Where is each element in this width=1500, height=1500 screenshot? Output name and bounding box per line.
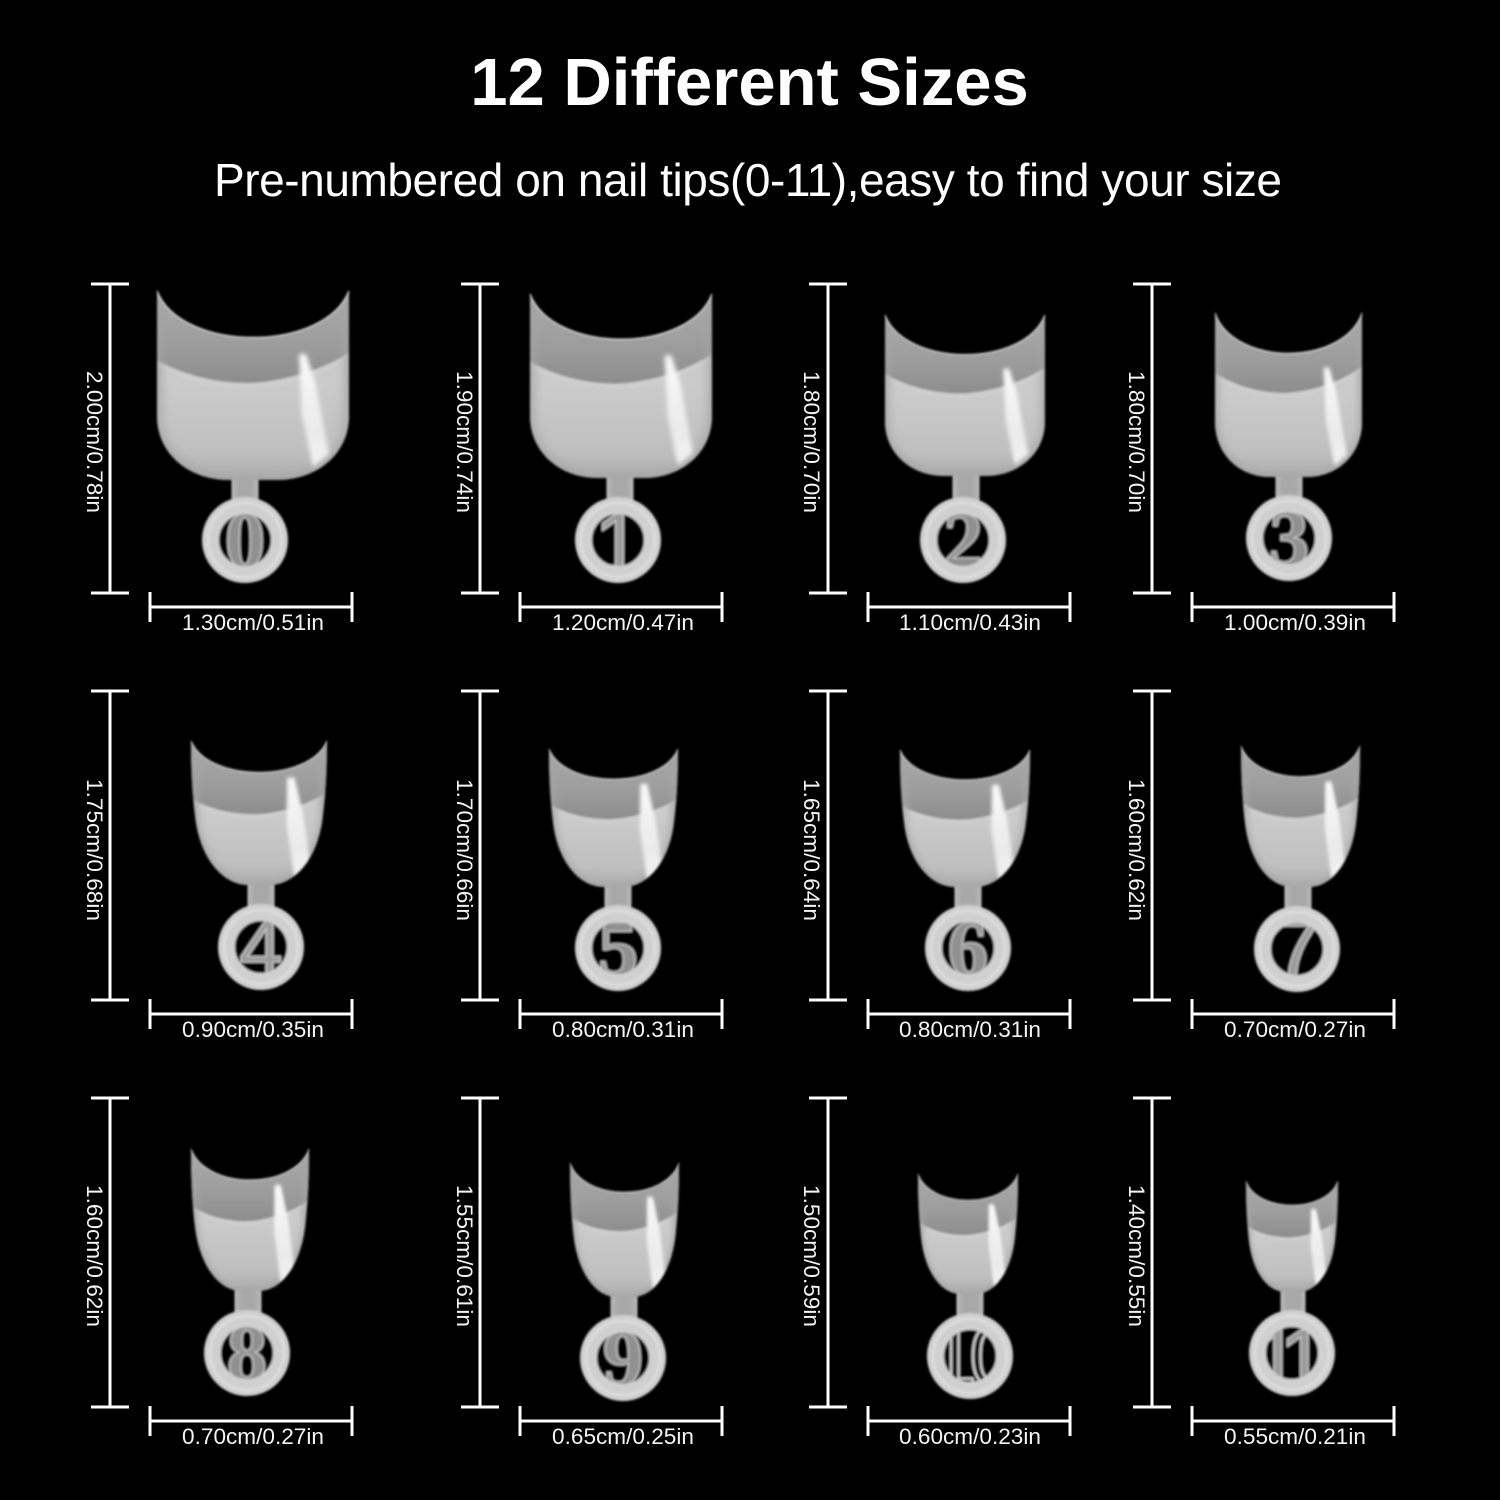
size 2 cell [799,284,1070,635]
size 10 cell [799,1098,1070,1449]
width dimension size 8 [150,1406,352,1449]
width dimension size 1 [520,592,722,635]
height dimension size 3: 1.80cm/0.70in [1124,371,1149,513]
nail tip size 2 [883,313,1047,585]
width dimension size 3: 1.00cm/0.39in [1224,610,1366,635]
nail tip size 7: 7 [1274,902,1320,996]
width dimension size 6: 0.80cm/0.31in [899,1017,1041,1042]
width dimension size 0: 1.30cm/0.51in [182,610,324,635]
nail tip size 3: 3 [1269,495,1309,583]
nail tip size 11 [1245,1180,1339,1406]
nail tip size 7 [1240,745,1361,996]
size 0 cell [82,284,352,635]
nail tip size 3 [1213,311,1364,583]
width dimension size 9: 0.65cm/0.25in [552,1424,694,1449]
width dimension size 2: 1.10cm/0.43in [899,610,1041,635]
height dimension size 10 [799,1098,847,1407]
height dimension size 0: 2.00cm/0.78in [82,371,107,513]
width dimension size 11 [1192,1406,1394,1449]
nail tip size 0 [155,289,351,585]
height dimension size 8 [82,1098,129,1407]
height dimension size 7: 1.60cm/0.62in [1124,779,1149,921]
height dimension size 11 [1124,1098,1171,1407]
size 1 cell [452,284,722,635]
width dimension size 9 [520,1406,722,1449]
width dimension size 4 [150,999,352,1042]
nail tip size 5 [548,748,679,993]
width dimension size 10: 0.60cm/0.23in [899,1424,1041,1449]
height dimension size 6: 1.65cm/0.64in [799,779,824,921]
width dimension size 10 [868,1406,1070,1449]
nail tip size 8: 8 [227,1310,267,1398]
height dimension size 11: 1.40cm/0.55in [1124,1185,1149,1327]
nail tip size 4: 4 [239,903,283,991]
height dimension size 5 [452,691,499,1000]
width dimension size 4: 0.90cm/0.35in [182,1017,324,1042]
height dimension size 7 [1124,691,1171,1000]
nail tip size 10: 10 [930,1309,1014,1403]
nail tip size 5: 5 [598,905,638,993]
subtitle: Pre-numbered on nail tips(0-11),easy to find your size [214,154,1282,206]
height dimension size 2: 1.80cm/0.70in [799,371,824,513]
nail tip size 8 [190,1147,310,1398]
size 8 cell [82,1098,352,1449]
title: 12 Different Sizes [470,45,1029,120]
height dimension size 4 [82,691,129,1000]
height dimension size 9 [452,1098,499,1407]
width dimension size 7: 0.70cm/0.27in [1224,1017,1366,1042]
nail tip size 1: 1 [595,496,641,590]
size 3 cell [1124,284,1394,635]
height dimension size 3 [1124,284,1171,593]
size 11 cell [1124,1098,1394,1449]
height dimension size 2 [799,284,847,593]
width dimension size 0 [150,592,352,635]
width dimension size 5 [520,999,722,1042]
nail tip size 6 [899,749,1031,993]
nail tip size 6: 6 [948,905,988,993]
height dimension size 6 [799,691,847,1000]
nail tip size 2: 2 [943,497,983,585]
nail tip size 9 [569,1162,680,1403]
width dimension size 11: 0.55cm/0.21in [1224,1424,1366,1449]
height dimension size 4: 1.75cm/0.68in [82,779,107,921]
nail tip size 9: 9 [603,1315,643,1403]
nail tip size 1 [528,292,714,590]
width dimension size 1: 1.20cm/0.47in [552,610,694,635]
nail tip size 10 [917,1173,1019,1403]
height dimension size 10: 1.50cm/0.59in [799,1185,824,1327]
size 9 cell [452,1098,722,1449]
nail tip size 11: 11 [1253,1312,1322,1406]
width dimension size 3 [1192,592,1394,635]
width dimension size 2 [868,592,1070,635]
height dimension size 8: 1.60cm/0.62in [82,1185,107,1327]
nail tip size 4 [190,739,328,991]
height dimension size 5: 1.70cm/0.66in [452,779,477,921]
height dimension size 0 [82,284,129,593]
width dimension size 8: 0.70cm/0.27in [182,1424,324,1449]
width dimension size 5: 0.80cm/0.31in [552,1017,694,1042]
height dimension size 1: 1.90cm/0.74in [452,371,477,513]
width dimension size 7 [1192,999,1394,1042]
width dimension size 6 [868,999,1070,1042]
size 7 cell [1124,691,1394,1042]
size 6 cell [799,691,1070,1042]
size 5 cell [452,691,722,1042]
nail tip size 0: 0 [225,497,265,585]
height dimension size 1 [452,284,499,593]
height dimension size 9: 1.55cm/0.61in [452,1185,477,1327]
size 4 cell [82,691,352,1042]
